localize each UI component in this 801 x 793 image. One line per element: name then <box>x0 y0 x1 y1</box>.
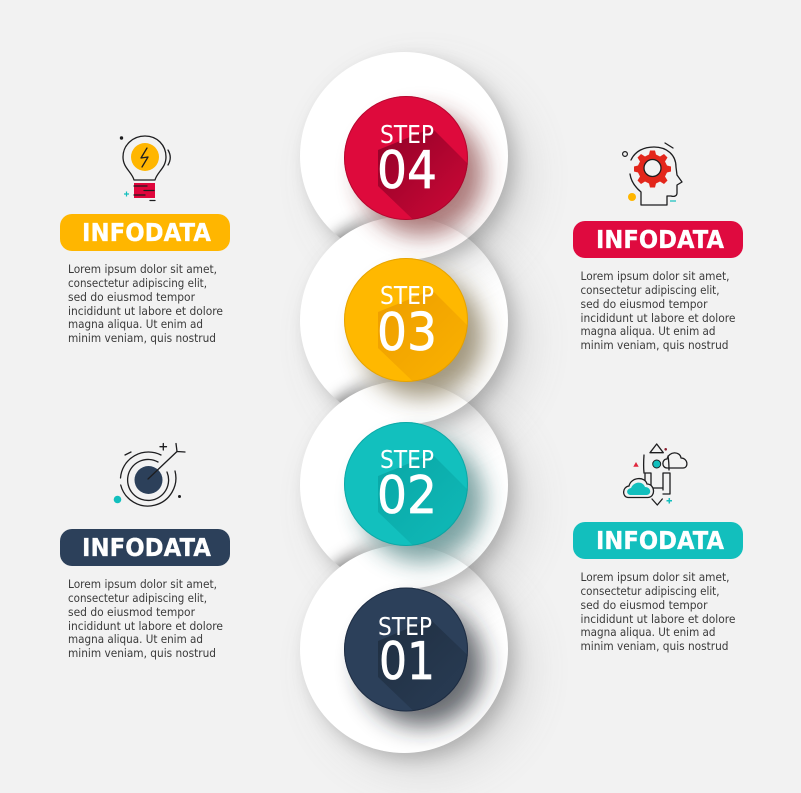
step 04 badge <box>344 96 484 236</box>
icon: target with arrow <box>114 444 185 506</box>
white twisted disc chain <box>300 52 524 769</box>
step 04 badge: 04 <box>377 141 437 201</box>
step 01 badge: STEP <box>378 612 432 641</box>
text block: top right <box>580 269 736 352</box>
step 03 badge <box>344 258 484 398</box>
step 01 badge <box>344 588 484 727</box>
step 01 badge: 01 <box>379 632 435 692</box>
infographic <box>60 49 743 782</box>
step 02 badge: STEP <box>380 445 434 474</box>
text block: top right: minim veniam, quis nostrud <box>580 338 728 352</box>
text block: top right: Lorem ipsum dolor sit amet, <box>580 269 730 283</box>
heading: infodata navy <box>60 529 230 566</box>
text block: bottom right <box>580 570 736 653</box>
text block: bottom right: consectetur adipiscing elit, <box>580 584 720 598</box>
text block: bottom left <box>68 577 223 660</box>
step 02 badge: 02 <box>377 466 437 526</box>
text block: top left: sed do eiusmod tempor <box>68 290 195 304</box>
text block: top left <box>68 262 223 345</box>
icon: light bulb <box>120 136 170 200</box>
text block: top left: Lorem ipsum dolor sit amet, <box>68 262 217 276</box>
text block: bottom right: sed do eiusmod tempor <box>580 598 708 612</box>
heading: infodata yellow: INFODATA <box>82 218 212 247</box>
heading: infodata red <box>573 221 743 258</box>
icon: head with gear <box>623 143 682 205</box>
heading: infodata navy: INFODATA <box>82 533 212 562</box>
step 02 badge <box>344 422 484 562</box>
heading: infodata red: INFODATA <box>596 225 725 254</box>
text block: bottom right: minim veniam, quis nostrud <box>580 639 728 653</box>
step 04 badge: STEP <box>380 120 434 149</box>
text block: bottom left: minim veniam, quis nostrud <box>68 646 216 660</box>
text block: top left: incididunt ut labore et dolore <box>68 304 223 318</box>
text block: bottom left: Lorem ipsum dolor sit amet, <box>68 577 217 591</box>
text block: bottom right: magna aliqua. Ut enim ad <box>580 625 716 639</box>
text block: bottom left: consectetur adipiscing elit, <box>68 591 207 605</box>
text block: top left: magna aliqua. Ut enim ad <box>68 317 203 331</box>
text block: top right: consectetur adipiscing elit, <box>580 283 720 297</box>
heading: infodata teal: INFODATA <box>596 526 725 555</box>
text block: top left: consectetur adipiscing elit, <box>68 276 207 290</box>
heading: infodata yellow <box>60 214 230 251</box>
icon: rocket and clouds <box>624 444 687 505</box>
heading: infodata teal <box>573 522 743 559</box>
text block: top right: magna aliqua. Ut enim ad <box>580 324 716 338</box>
text block: bottom left: incididunt ut labore et dolore <box>68 619 223 633</box>
text block: bottom left: magna aliqua. Ut enim ad <box>68 632 203 646</box>
text block: top right: sed do eiusmod tempor <box>580 297 708 311</box>
step 03 badge: 03 <box>377 303 437 363</box>
text block: bottom left: sed do eiusmod tempor <box>68 605 195 619</box>
text block: top right: incididunt ut labore et dolore <box>580 311 736 325</box>
text block: bottom right: Lorem ipsum dolor sit amet, <box>580 570 730 584</box>
text block: bottom right: incididunt ut labore et dolore <box>580 612 736 626</box>
text block: top left: minim veniam, quis nostrud <box>68 331 216 345</box>
step 03 badge: STEP <box>380 281 434 310</box>
